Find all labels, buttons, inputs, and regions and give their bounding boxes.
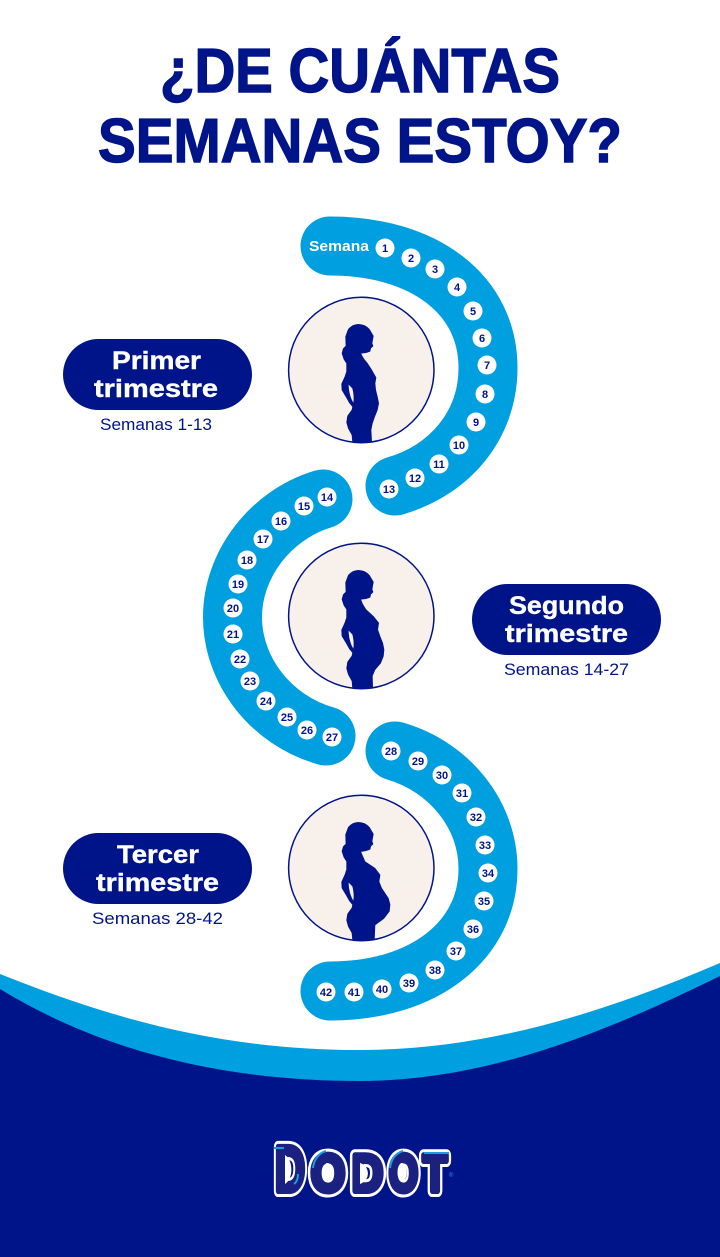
panel: third trimester arc: 39 <box>403 978 415 990</box>
title: SEMANAS ESTOY? <box>98 107 622 176</box>
panel: second trimester arc: 22 <box>234 654 246 666</box>
panel: first trimester arc: 1 <box>382 243 388 255</box>
panel: third trimester arc: 30 <box>436 770 448 782</box>
panel: third trimester arc: 42 <box>320 987 332 999</box>
callout: third trimester <box>63 833 252 928</box>
panel: third trimester arc: 33 <box>479 840 491 852</box>
panel: third trimester arc: 31 <box>456 788 468 800</box>
logo: Dodot: O <box>311 1145 345 1203</box>
logo: Dodot: O <box>311 1145 345 1203</box>
icon: pregnant silhouette, early <box>289 297 434 443</box>
logo: Dodot: ® <box>449 1172 454 1179</box>
panel: third trimester arc: 40 <box>376 984 388 996</box>
panel: third trimester arc: 35 <box>478 896 490 908</box>
panel: third trimester arc: 32 <box>470 812 482 824</box>
title: ¿DE CUÁNTAS <box>160 37 560 106</box>
panel: third trimester arc: 37 <box>450 946 462 958</box>
panel: third trimester arc: 41 <box>348 987 360 999</box>
icon: pregnant silhouette, middle <box>289 543 434 689</box>
panel: first trimester arc: 12 <box>409 473 421 485</box>
panel: second trimester arc: 21 <box>227 629 239 641</box>
callout: second trimester: Semanas 14-27 <box>504 660 629 679</box>
logo: Dodot: D <box>352 1145 383 1203</box>
panel: second trimester arc: 26 <box>301 725 313 737</box>
panel: second trimester arc: 24 <box>260 696 273 708</box>
panel: second trimester arc: 27 <box>326 732 338 744</box>
panel: second trimester arc <box>224 488 342 746</box>
panel: first trimester arc <box>309 238 496 498</box>
panel: second trimester arc: 18 <box>241 555 253 567</box>
panel: first trimester arc: 5 <box>470 306 476 318</box>
panel: third trimester arc: 36 <box>467 924 479 936</box>
callout: first trimester <box>63 339 252 434</box>
panel: footer wave <box>0 963 720 1257</box>
panel: second trimester arc: 15 <box>298 501 310 513</box>
panel: first trimester arc: 11 <box>433 459 445 471</box>
panel: second trimester arc: 14 <box>321 492 334 504</box>
panel: first trimester arc: 10 <box>453 440 465 452</box>
title <box>98 37 622 176</box>
panel: third trimester arc: 29 <box>412 756 424 768</box>
logo: Dodot: O <box>389 1145 418 1203</box>
panel: third trimester arc: 28 <box>385 746 397 758</box>
panel: second trimester arc: 16 <box>275 516 287 528</box>
callout: second trimester <box>472 584 661 679</box>
callout: first trimester: trimestre <box>94 375 218 403</box>
panel: second trimester arc: 20 <box>227 603 239 615</box>
panel: first trimester arc: Semana <box>309 238 370 255</box>
callout: second trimester: Segundo <box>509 592 624 620</box>
panel: first trimester arc: 4 <box>454 282 461 294</box>
callout: third trimester: Tercer <box>117 841 199 869</box>
logo: Dodot: D <box>352 1145 383 1203</box>
panel: third trimester arc: 34 <box>482 868 495 880</box>
panel: first trimester arc: 9 <box>473 417 479 429</box>
panel: first trimester arc: 7 <box>484 360 490 372</box>
panel: second trimester arc: 23 <box>244 676 256 688</box>
panel: first trimester arc: 6 <box>479 333 485 345</box>
logo: Dodot: T <box>423 1145 447 1203</box>
logo: Dodot <box>274 1133 454 1205</box>
logo: Dodot: T <box>423 1145 447 1203</box>
panel: first trimester arc: 8 <box>482 389 488 401</box>
panel: third trimester arc: 38 <box>429 965 441 977</box>
panel: third trimester arc <box>316 742 498 1002</box>
logo: Dodot: D <box>275 1133 305 1205</box>
panel: first trimester arc: 13 <box>383 484 395 496</box>
callout: third trimester: trimestre <box>96 869 219 897</box>
panel: first trimester arc: 3 <box>432 264 438 276</box>
logo: Dodot: D <box>275 1133 305 1205</box>
callout: third trimester: Semanas 28-42 <box>92 909 223 928</box>
logo: Dodot: O <box>389 1145 418 1203</box>
panel: second trimester arc: 17 <box>257 534 269 546</box>
callout: second trimester: trimestre <box>505 620 628 648</box>
panel: second trimester arc: 25 <box>281 712 293 724</box>
panel: second trimester arc: 19 <box>232 579 244 591</box>
icon: pregnant silhouette, late <box>289 795 434 941</box>
panel: first trimester arc: 2 <box>408 253 414 265</box>
callout: first trimester: Primer <box>112 347 201 375</box>
callout: first trimester: Semanas 1-13 <box>100 415 212 434</box>
